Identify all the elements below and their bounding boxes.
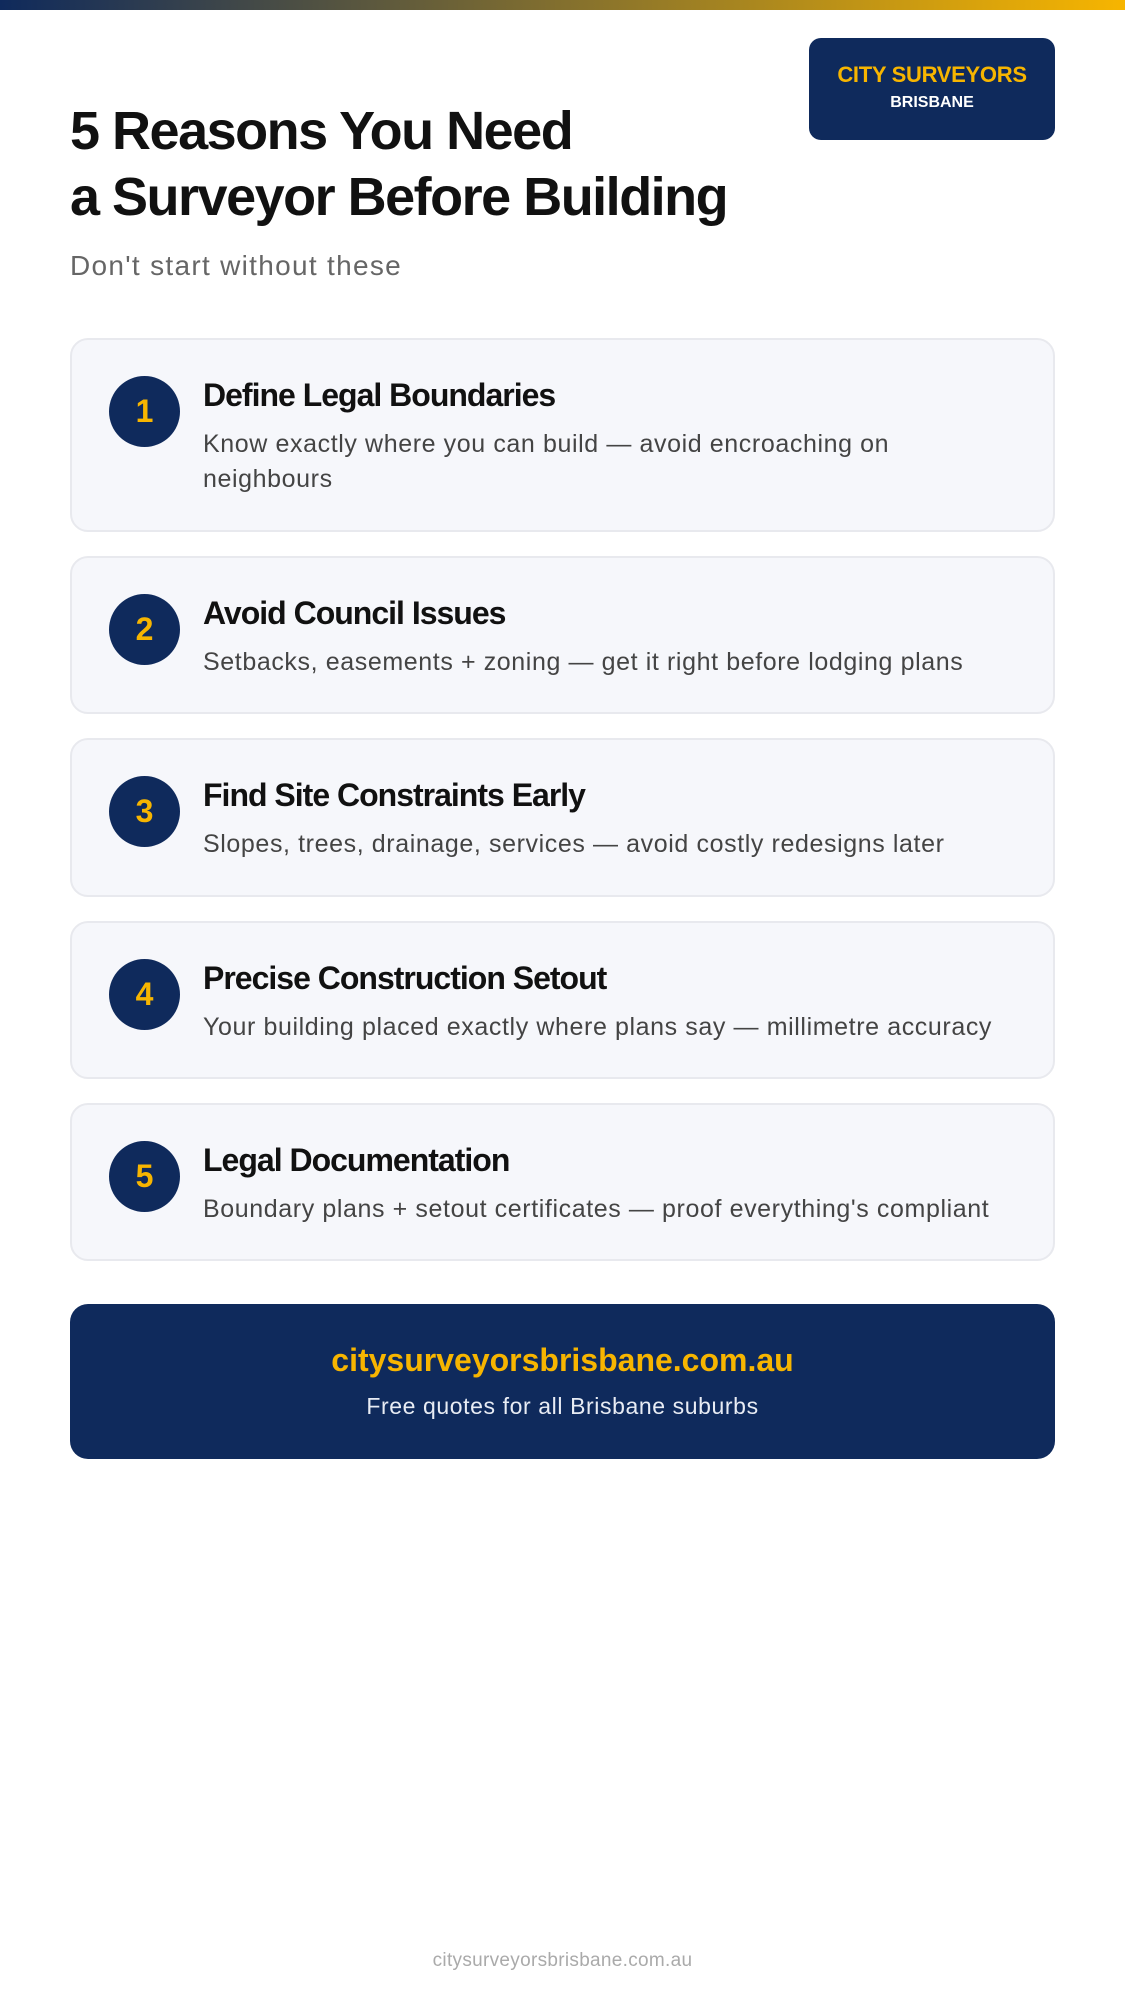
CTA banner: Free quotes for all Brisbane suburbs: [366, 1393, 759, 1419]
card 1: 1: [136, 393, 153, 429]
card 4: 4: [136, 976, 153, 1012]
subtitle: Don't start without these: [70, 250, 402, 281]
card 2: 2: [136, 611, 153, 647]
card 4: Precise Construction Setout: [203, 960, 606, 996]
title: a Surveyor Before Building: [70, 167, 727, 227]
logo badge: CITY SURVEYORS: [837, 62, 1027, 87]
card 5: Boundary plans + setout certificates — proof everything's compliant: [203, 1195, 989, 1223]
card 2: [70, 556, 1055, 714]
logo badge: [809, 38, 1055, 140]
CTA banner: [70, 1304, 1055, 1459]
top gradient bar: [0, 0, 1125, 10]
card 5: [70, 1103, 1055, 1261]
logo badge: BRISBANE: [890, 94, 974, 111]
card 1: [70, 338, 1055, 532]
card 1: Define Legal Boundaries: [203, 377, 555, 413]
card 5: 5: [136, 1158, 153, 1194]
card 3: [70, 738, 1055, 897]
card 5: Legal Documentation: [203, 1142, 509, 1178]
card 3: Slopes, trees, drainage, services — avoid costly redesigns later: [203, 830, 945, 858]
CTA banner: citysurveyorsbrisbane.com.au: [331, 1342, 794, 1378]
footer url: citysurveyorsbrisbane.com.au: [433, 1950, 692, 1971]
card 4: Your building placed exactly where plans say — millimetre accuracy: [203, 1013, 992, 1041]
card 4: [70, 921, 1055, 1079]
card 2: Setbacks, easements + zoning — get it right before lodging plans: [203, 648, 963, 676]
card 2: Avoid Council Issues: [203, 595, 505, 631]
card 3: 3: [136, 793, 153, 829]
card 1: Know exactly where you can build — avoid encroaching on neighbours: [203, 430, 889, 493]
card 3: Find Site Constraints Early: [203, 777, 585, 813]
title: [70, 101, 727, 227]
title: 5 Reasons You Need: [70, 101, 572, 161]
